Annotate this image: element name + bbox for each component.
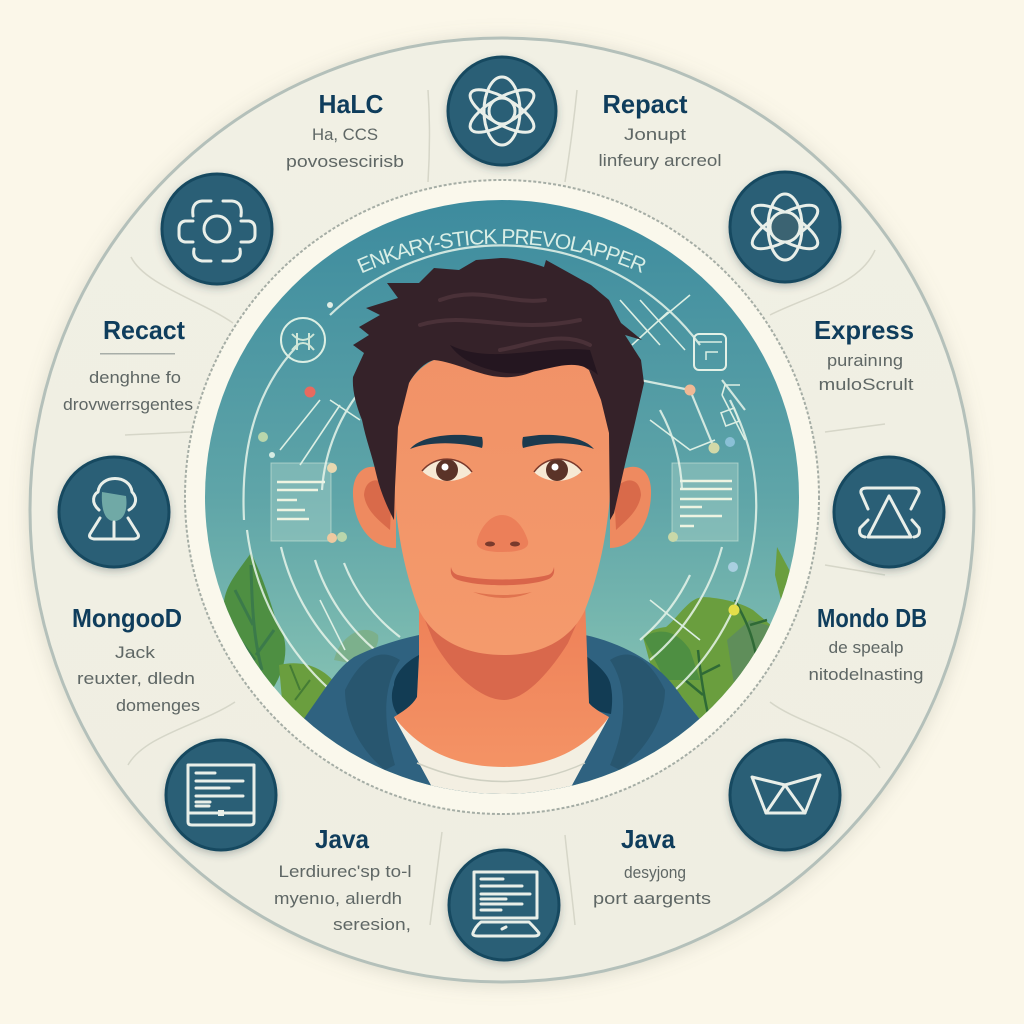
text block: HaLC [286, 89, 404, 171]
text block: Mondo DB: Mondo DB [817, 603, 927, 633]
text block: Repact: linfeury arcreol [598, 151, 722, 170]
panel: segment connector lines [125, 90, 885, 925]
text block: MongooD: domenges [116, 696, 200, 715]
text block: Recact [63, 315, 193, 414]
face [394, 352, 612, 655]
right hud panel [672, 463, 738, 541]
eyebrows [410, 435, 594, 449]
icon: right emblem [694, 334, 726, 370]
text block: Express [814, 315, 914, 394]
text block: Mondo DB [808, 603, 927, 684]
icon: right triangle [834, 457, 944, 567]
icon: lower left laptop document [166, 740, 276, 850]
text block: Repact: Jonupt [624, 125, 686, 144]
text block: Express: purainıng [827, 351, 903, 370]
neck and chest [394, 600, 609, 767]
text block: Java left [274, 824, 412, 934]
mouth [451, 567, 554, 598]
text block: Java right: desyjong [624, 863, 686, 882]
text block: MongooD [72, 603, 200, 715]
text block: Repact [598, 89, 722, 170]
text block: Java right: port aargents [593, 889, 711, 908]
nose [477, 515, 528, 552]
left hud panel [271, 463, 331, 541]
text block: MongooD: MongooD [72, 603, 182, 633]
teal background disc [205, 200, 799, 794]
icon: gear upper left [162, 174, 272, 284]
shirt [394, 717, 609, 800]
leaves right [643, 547, 793, 727]
icon: left person [59, 457, 169, 567]
icon: bottom laptop [449, 850, 559, 960]
text block: Express: Express [814, 315, 914, 345]
text block: Mondo DB: nitodelnasting [808, 665, 924, 684]
icon: top atom [448, 57, 556, 165]
text block: HaLC: HaLC [318, 89, 384, 119]
text block: Express: muloScrult [818, 375, 914, 394]
text block: Java left: Java [315, 824, 370, 854]
text block: Recact: denghne fo [89, 368, 181, 387]
panel: central portrait illustration [205, 200, 799, 810]
hoodie [304, 635, 700, 794]
text block: HaLC: Ha, CCS [312, 125, 378, 144]
ears [353, 467, 651, 548]
icon: left emblem [281, 318, 325, 362]
text block: Java left: Lerdiurec'sp to-l [278, 862, 412, 881]
title: curved heading: ENKARY-STICK PREVOLAPPER [357, 229, 646, 273]
circuit rings [243, 245, 756, 695]
eyes [422, 459, 582, 481]
text block: Java right [593, 824, 711, 908]
small tab [218, 810, 224, 816]
text block: Mondo DB: de spealp [828, 638, 904, 657]
text block: MongooD: Jack [115, 643, 156, 662]
icon: lower right envelope [730, 740, 840, 850]
text block: Java left: seresion, [333, 915, 411, 934]
text block: Repact: Repact [602, 89, 688, 119]
icon: upper right atom [730, 172, 840, 282]
text block: Java left: myenıo, alıerdh [274, 889, 402, 908]
panel: central cream ring [185, 180, 819, 814]
text block: MongooD: reuxter, dledn [77, 669, 195, 688]
text block: HaLC: povosescirisb [286, 152, 404, 171]
neck shadow [425, 620, 576, 700]
leaves left [224, 553, 378, 722]
hud circuit details [280, 295, 745, 650]
text block: Recact: Recact [103, 315, 185, 345]
hud dots [258, 302, 740, 616]
hair [353, 258, 644, 520]
text block: Recact: drovwerrsgentes [63, 395, 193, 414]
text block: Java right: Java [621, 824, 676, 854]
